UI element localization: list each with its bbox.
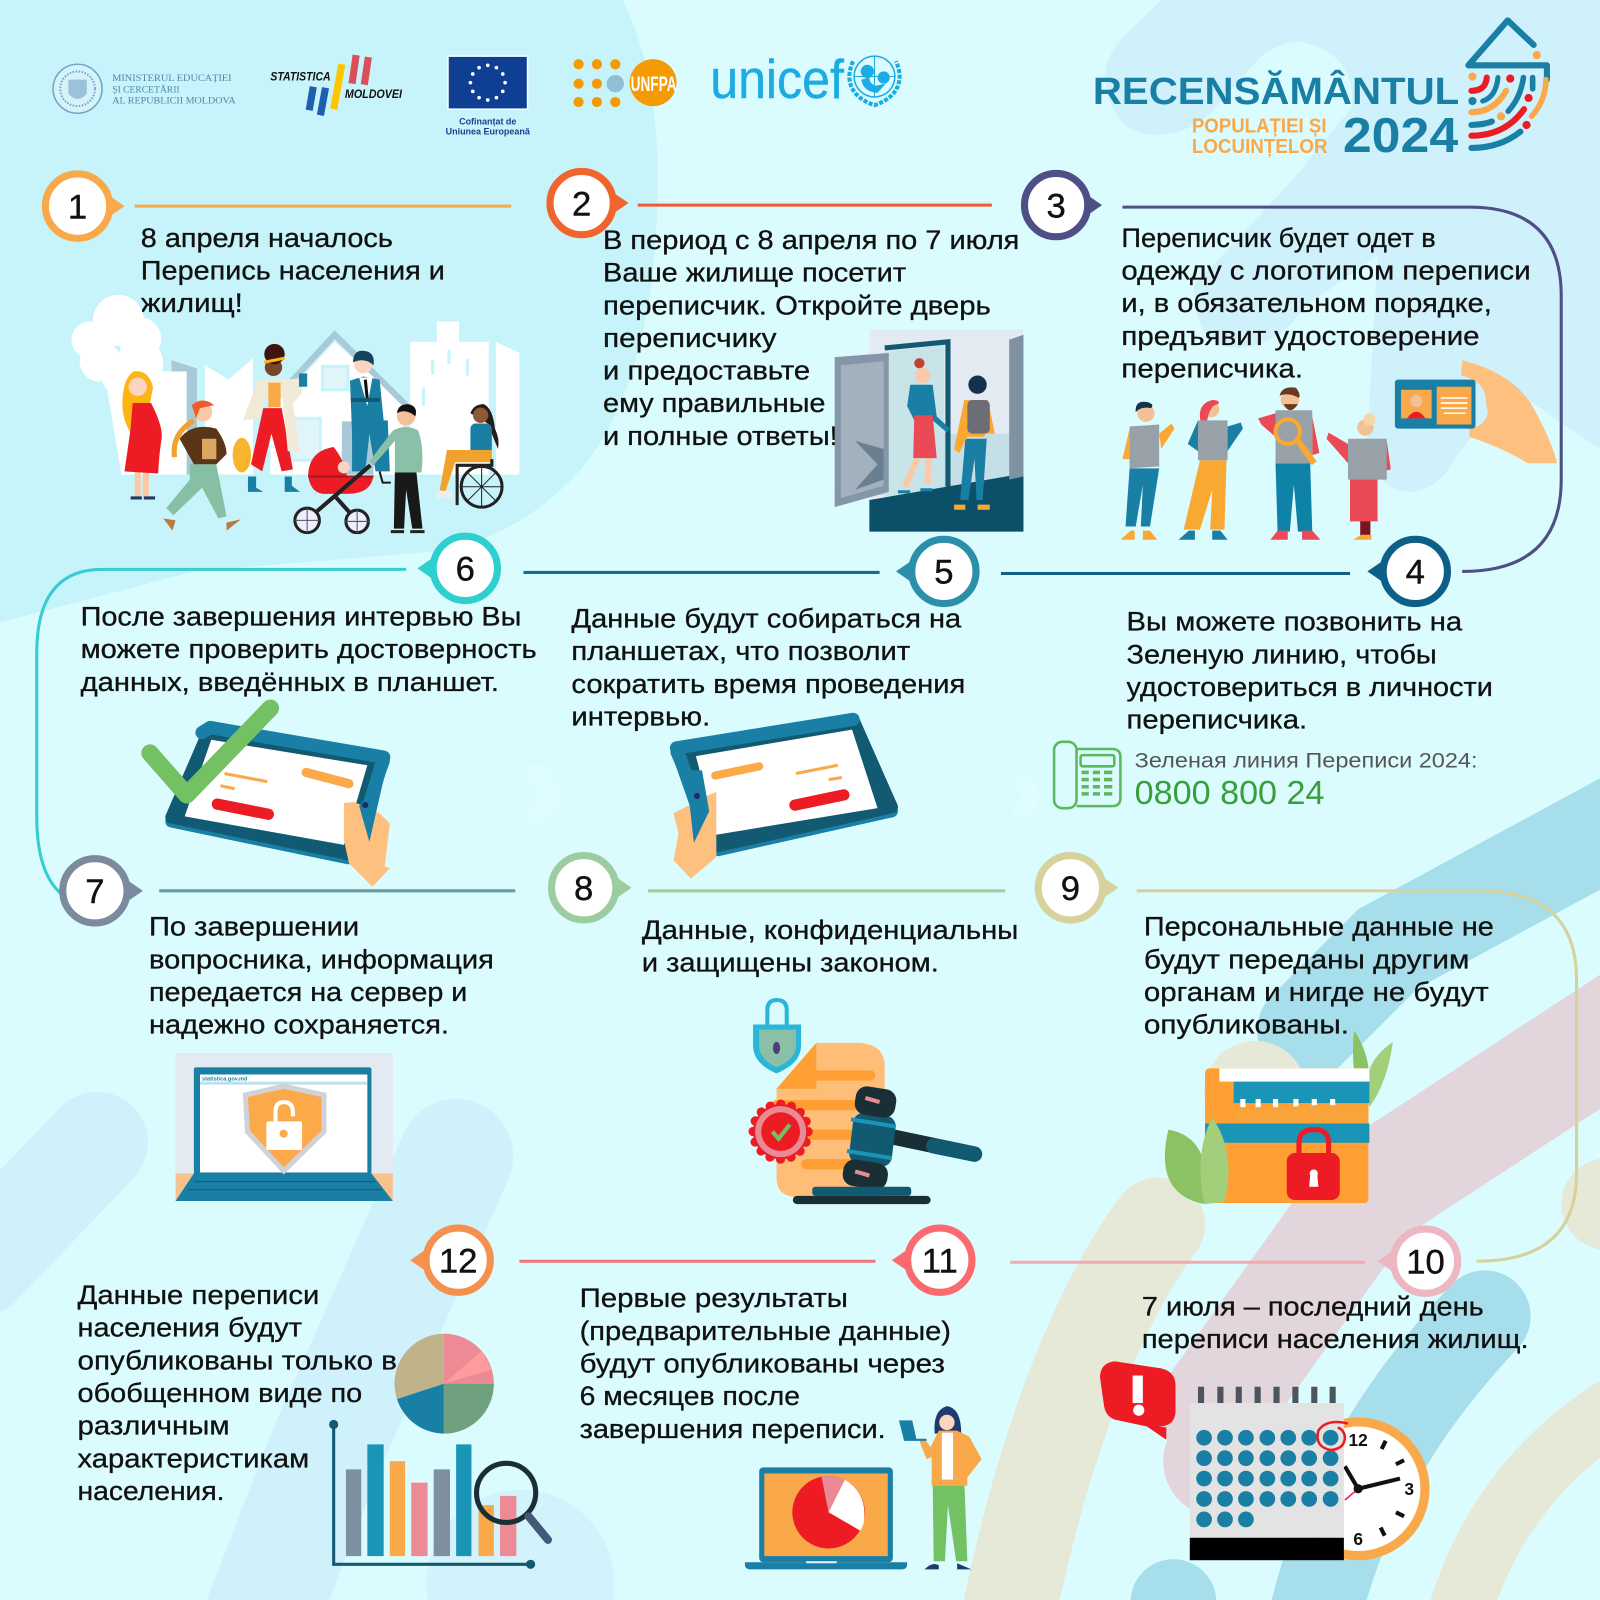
logo: Statistica Moldovei: [270, 55, 403, 115]
chart: pie chart: [395, 1334, 494, 1434]
step 4 text: удостовериться в личности: [1127, 672, 1493, 702]
step 1 text: [141, 223, 445, 318]
tree and buildings: [71, 295, 519, 474]
illustration: document, shield, seal and gavel: [753, 1000, 974, 1204]
connector lines: [37, 205, 1577, 1262]
step 3 number badge: 3: [1046, 187, 1066, 225]
step 12 text: населения будут: [78, 1313, 302, 1343]
step 7 text: По завершении: [149, 912, 359, 942]
clock: 12: [1349, 1430, 1368, 1450]
man with backpack: [954, 376, 995, 507]
step 5 text: сократить время проведения: [571, 669, 965, 699]
stroller: [295, 447, 373, 534]
step 2 text: и полные ответы!: [603, 421, 838, 451]
step 12 text: Данные переписи: [78, 1280, 319, 1310]
green leaf: [1165, 1130, 1206, 1204]
step 4 text: Зеленую линию, чтобы: [1127, 639, 1437, 669]
step 9 number badge: [1038, 856, 1118, 920]
step 5 number badge: 5: [934, 554, 954, 592]
step 5 text: Данные будут собираться на: [571, 604, 961, 634]
seal: [753, 1104, 808, 1159]
ID card and hand: [1395, 360, 1557, 463]
chart: bar chart with magnifier: [329, 1420, 548, 1569]
step 4 number badge: 4: [1406, 554, 1425, 592]
logo: Recensământul 2024: RECENSĂMÂNTUL: [1093, 70, 1459, 112]
step 8 number badge: 8: [574, 870, 593, 908]
clock: 6: [1353, 1529, 1363, 1549]
step 2 text: переписчику: [603, 323, 777, 353]
step 12 number badge: 12: [439, 1242, 477, 1280]
logo: unicef: unicef: [710, 48, 845, 110]
green line phone number: [1135, 748, 1478, 812]
green line phone number: 0800 800 24: [1135, 775, 1324, 812]
step 3 text: одежду с логотипом переписи: [1121, 256, 1531, 286]
step 1 text: Перепись населения и: [141, 256, 445, 286]
boy with backpack: [163, 401, 241, 531]
illustration: laptop with pie chart and woman: [745, 1406, 982, 1569]
illustration: tablet in hand: [673, 719, 892, 879]
logo: European Union: [446, 56, 531, 137]
step 6 number badge: 6: [456, 551, 475, 589]
logo: Statistica Moldovei: STATISTICA: [270, 71, 331, 84]
logo: Recensământul 2024: 2024: [1343, 109, 1458, 163]
logo: Recensământul 2024: [1093, 20, 1547, 163]
step 6 text: данных, введённых в планшет.: [81, 667, 499, 697]
step 2 number badge: [550, 171, 629, 235]
illustration: laptop with shield: [176, 1053, 393, 1201]
step 10 text: 7 июля – последний день: [1142, 1291, 1484, 1321]
step 3 text: Переписчик будет одет в: [1121, 223, 1436, 253]
step 7 text: надежно сохраняется.: [149, 1010, 449, 1040]
step 7 text: вопросника, информация: [149, 944, 494, 974]
step 9 number badge: 9: [1061, 870, 1080, 908]
step 10 text: [1142, 1291, 1529, 1354]
step 8 text: Данные, конфиденциальны: [642, 915, 1018, 945]
step 8 number badge: [552, 856, 632, 920]
logo: European Union: Cofinanțat de: [459, 116, 516, 126]
woman at door: [898, 358, 950, 492]
logo: Recensământul 2024: POPULAȚIEI ȘI: [1192, 116, 1327, 138]
step 12 text: опубликованы только в: [78, 1345, 397, 1375]
step 3 text: и, в обязательном порядке,: [1121, 288, 1492, 318]
illustration: tablet with check mark: [150, 708, 390, 887]
step 12 text: обобщенном виде по: [78, 1378, 362, 1408]
step 2 text: переписчик. Откройте дверь: [603, 290, 991, 320]
green line phone number: Зеленая линия Переписи 2024:: [1135, 748, 1478, 772]
step 6 text: [81, 602, 537, 697]
enumerator 3 with magnifier: [1258, 387, 1320, 540]
step 7 number badge: [63, 859, 143, 923]
logo: Ministry of Education: ȘI CERCETĂRII: [112, 83, 180, 95]
step 9 text: будут переданы другим: [1144, 944, 1469, 974]
green check mark: [150, 708, 270, 795]
step 2 number badge: 2: [572, 185, 591, 223]
woman in blue suit: [350, 351, 391, 483]
step 4 text: Вы можете позвонить на: [1127, 607, 1463, 637]
step 11 number badge: 11: [922, 1242, 958, 1280]
step 11 text: 6 месяцев после: [580, 1381, 800, 1411]
step 10 text: переписи населения жилищ.: [1142, 1324, 1529, 1354]
step 9 text: опубликованы.: [1144, 1010, 1349, 1040]
step 2 text: и предоставьте: [603, 356, 810, 386]
clock: [1287, 1417, 1430, 1560]
step 3 number badge: [1024, 173, 1102, 237]
step 12 number badge: [410, 1228, 490, 1292]
step 8 text: и защищены законом.: [642, 947, 939, 977]
alert bubble: [1100, 1361, 1176, 1440]
step 10 number badge: [1378, 1229, 1458, 1293]
illustration: enumerator at door: [835, 330, 1023, 532]
step 12 text: характеристикам: [78, 1443, 309, 1473]
enumerator 1: [1120, 402, 1174, 540]
logo: European Union: Uniunea Europeană: [446, 127, 531, 137]
step 7 text: [149, 912, 494, 1040]
step 9 text: [1144, 912, 1494, 1040]
logo: Statistica Moldovei: MOLDOVEI: [345, 88, 403, 101]
logo: UNFPA: [573, 59, 677, 107]
step 11 text: [580, 1283, 951, 1444]
step 10 number badge: 10: [1406, 1243, 1445, 1281]
step 5 text: интервью.: [571, 702, 710, 732]
step 8 text: [642, 915, 1018, 977]
step 7 text: передается на сервер и: [149, 977, 467, 1007]
illustration: locked folder with leaves: [1165, 1031, 1393, 1204]
clock: 3: [1404, 1479, 1414, 1499]
step 11 number badge: [892, 1228, 972, 1292]
step 1 number badge: [45, 174, 124, 238]
step 11 text: (предварительные данные): [580, 1316, 951, 1346]
logo: Ministry of Education: AL REPUBLICII MOLDOVA: [112, 96, 236, 107]
step 2 text: ему правильные: [603, 388, 826, 418]
step 4 text: [1127, 607, 1493, 735]
step 3 text: предъявит удостоверение: [1121, 321, 1480, 351]
step 3 text: [1121, 223, 1531, 384]
pregnant woman: [122, 371, 162, 498]
step 11 text: завершения переписи.: [580, 1414, 886, 1444]
step 3 text: переписчика.: [1121, 354, 1303, 384]
logo: Ministry of Education: MINISTERUL EDUCAȚIEI: [112, 73, 232, 84]
step 12 text: [78, 1280, 397, 1506]
logo: UNFPA: UNFPA: [631, 72, 677, 96]
lock shield: [753, 1000, 801, 1073]
step 12 text: различным: [78, 1411, 230, 1441]
illustration: four enumerators: [1120, 360, 1557, 540]
gavel: [793, 1085, 974, 1204]
step 5 text: планшетах, что позволит: [571, 636, 910, 666]
step 1 text: 8 апреля началось: [141, 223, 393, 253]
step 5 text: [571, 604, 965, 732]
step 6 text: можете проверить достоверность: [81, 634, 537, 664]
step 4 text: переписчика.: [1127, 705, 1307, 735]
step 6 number badge: [417, 536, 497, 601]
step 11 text: будут опубликованы через: [580, 1348, 945, 1378]
step 1 number badge: 1: [68, 188, 87, 226]
step 1 text: жилищ!: [141, 288, 243, 318]
step 12 text: населения.: [78, 1476, 224, 1506]
step 2 text: Ваше жилище посетит: [603, 258, 906, 288]
enumerator 4: [1327, 413, 1391, 540]
woman with coat and bag: [233, 344, 307, 492]
enumerator 2: [1179, 400, 1243, 540]
step 9 text: органам и нигде не будут: [1144, 977, 1489, 1007]
illustration: laptop with shield: statistica.gov.md: [202, 1077, 248, 1083]
step 11 text: Первые результаты: [580, 1283, 848, 1313]
step 2 text: [603, 225, 1019, 451]
step 2 text: В период с 8 апреля по 7 июля: [603, 225, 1019, 255]
logo: Ministry of Education: [53, 64, 236, 113]
step 9 text: Персональные данные не: [1144, 912, 1494, 942]
step 5 number badge: [896, 539, 976, 604]
calendar: [1190, 1387, 1348, 1560]
woman with tablet: [899, 1406, 982, 1569]
step 7 number badge: 7: [85, 873, 105, 911]
illustration: calendar, clock and alert: [1100, 1361, 1430, 1560]
step 4 number badge: [1367, 539, 1447, 604]
illustration: people in front of town: [71, 295, 519, 534]
logo: Recensământul 2024: LOCUINȚELOR: [1192, 136, 1328, 158]
boy in green sweater: [369, 404, 424, 532]
red padlock: [1287, 1130, 1340, 1200]
woman in wheelchair: [437, 404, 502, 507]
icon: phone: [1054, 742, 1120, 808]
step 6 text: После завершения интервью Вы: [81, 602, 521, 632]
